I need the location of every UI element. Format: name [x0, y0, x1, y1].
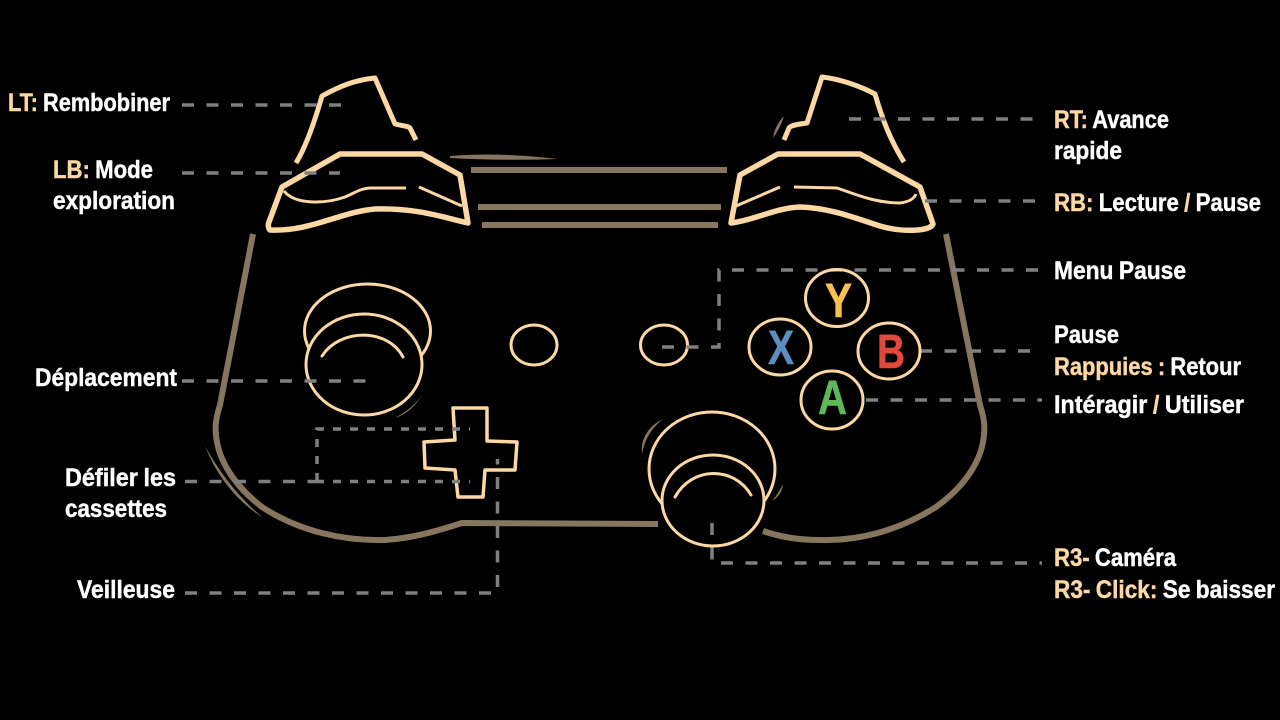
button B [858, 323, 920, 379]
d-pad [424, 408, 517, 497]
button A [801, 371, 863, 429]
right stick [642, 412, 783, 546]
button B: B [877, 326, 905, 379]
button X: X [768, 322, 794, 375]
label: LB: LB: Mode [53, 156, 153, 184]
label: LB [53, 156, 175, 215]
button Y [806, 270, 868, 328]
button X [749, 319, 811, 375]
right bumper RB [731, 154, 933, 230]
right trigger RT [784, 77, 904, 162]
left trigger LT [296, 78, 416, 163]
button Y: Y [825, 275, 852, 328]
controller body outline [205, 116, 984, 540]
label: B [1054, 321, 1241, 381]
label: défiler les cassettes: Défiler les [65, 464, 176, 492]
label: RT: rapide [1054, 137, 1122, 165]
label: B: Pause [1054, 321, 1119, 349]
label: R3: R3- Caméra [1054, 544, 1177, 572]
label: A: Intéragir / Utiliser [1054, 391, 1244, 419]
label: LT: LT: Rembobiner [8, 89, 170, 117]
label: défiler les cassettes: cassettes [65, 495, 167, 523]
label: menu pause: Menu Pause [1054, 257, 1186, 285]
label: veilleuse: Veilleuse [77, 576, 175, 604]
button A: A [818, 372, 847, 425]
dashed leader lines [182, 105, 1042, 593]
label: défiler les cassettes [65, 464, 176, 523]
left stick [304, 284, 430, 418]
label: RT [1054, 106, 1169, 165]
label: R3 [1054, 544, 1275, 604]
label: déplacement: Déplacement [35, 364, 178, 392]
label: RT: RT: Avance [1054, 106, 1169, 134]
label: LB: exploration [53, 187, 175, 215]
centre buttons [511, 325, 688, 365]
left bumper LB [268, 154, 468, 230]
face buttons [749, 270, 920, 429]
label: RB: RB: Lecture / Pause [1054, 189, 1261, 217]
label: B: Rappuies : Retour [1054, 353, 1241, 381]
